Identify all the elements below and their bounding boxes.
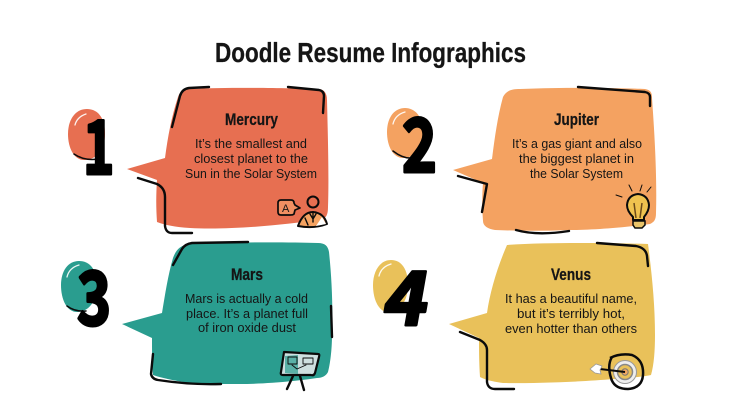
circle 3: [61, 261, 97, 312]
doodle outline: Mars: [151, 242, 332, 384]
numeral 1: 1: [83, 88, 114, 196]
text: Mercury description: It’s the smallest and: [195, 136, 307, 151]
number 3 with circle: [61, 240, 111, 347]
numeral 3: 3: [77, 240, 111, 347]
numeral 4: 4: [377, 240, 440, 347]
panel: Jupiter: [453, 87, 656, 233]
text: Jupiter description: the biggest planet in: [519, 151, 634, 166]
text: Venus description: It has a beautiful name,: [505, 291, 637, 306]
speech bubble: Mercury: [127, 88, 328, 229]
icon: target with arrow: [590, 354, 643, 389]
circle 4: [373, 260, 408, 312]
text: Mars description: Mars is actually a cold: [185, 291, 308, 306]
text: Mars description: of iron oxide dust: [198, 320, 296, 335]
text: Venus description: but it’s terribly hot,: [517, 306, 625, 321]
number 4 with circle: [373, 240, 440, 347]
text: Mercury description: closest planet to the: [194, 151, 308, 166]
doodle outline: Venus: [460, 243, 648, 389]
icon: light bulb: [616, 185, 651, 228]
doodle outline: Jupiter: [458, 87, 650, 233]
panel: Mercury: [127, 87, 328, 233]
speech bubble: Venus: [449, 243, 655, 383]
text: Mercury description: [185, 136, 317, 181]
icon: person with speech bubble: A: [282, 203, 290, 215]
text: Venus description: [505, 291, 637, 336]
text: Venus description: even hotter than others: [505, 321, 637, 336]
heading: Jupiter: Jupiter: [554, 111, 599, 129]
numeral 2: 2: [402, 87, 437, 194]
heading: Mars: Mars: [231, 266, 263, 284]
text: Jupiter description: the Solar System: [530, 166, 623, 181]
speech bubble: Jupiter: [453, 88, 656, 231]
text: Jupiter description: It’s a gas giant and also: [512, 136, 642, 151]
icon: person with speech bubble: [278, 196, 327, 227]
heading: Venus: Venus: [551, 266, 591, 284]
title: Doodle Resume Infographics: [215, 37, 526, 68]
panel: Venus: [449, 243, 655, 389]
speech bubble: Mars: [122, 242, 332, 384]
text: Mercury description: Sun in the Solar System: [185, 166, 317, 181]
heading: Mercury: Mercury: [225, 111, 279, 129]
panel: Mars: [122, 242, 332, 390]
text: Mars description: [185, 291, 308, 335]
text: Mars description: place. It’s a planet full: [186, 306, 308, 321]
doodle outline: Mercury: [138, 87, 324, 233]
number 1 with circle: [68, 88, 114, 196]
circle 2: [387, 108, 423, 158]
icon: presentation board: [281, 352, 319, 390]
text: Jupiter description: [512, 136, 642, 181]
circle 1: [68, 109, 105, 160]
number 2 with circle: [387, 87, 437, 194]
